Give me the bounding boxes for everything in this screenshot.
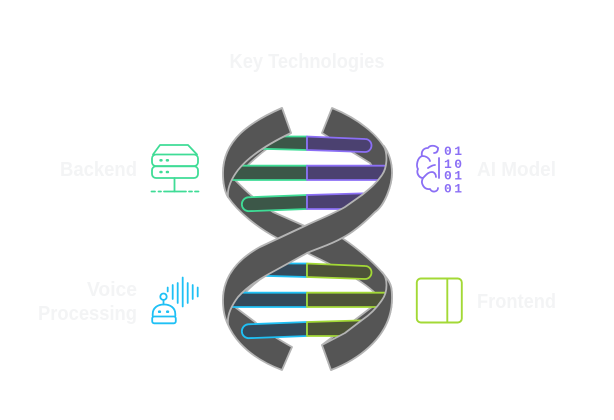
rung 4 blue — [252, 264, 307, 277]
front ribbon piece centre crossing — [223, 146, 392, 324]
back ribbon B — [223, 108, 392, 370]
label: AI Model: AI Model — [477, 159, 556, 181]
icon: server — [152, 145, 198, 192]
rung 2 purple — [307, 166, 388, 180]
rung 1 purple — [307, 136, 372, 152]
DNA helix diagram — [223, 108, 392, 370]
rung 3 purple — [307, 193, 375, 209]
rung 5 lime — [307, 293, 388, 307]
binary digits: 10 — [444, 157, 465, 172]
rung 6 blue — [242, 322, 307, 338]
label: Backend: Backend — [60, 159, 137, 181]
icon: brain with binary digits — [417, 144, 465, 196]
front ribbon piece lower right — [322, 272, 392, 370]
rung 4 lime — [307, 264, 372, 279]
binary digits — [444, 144, 465, 196]
binary digits: 01 — [444, 168, 465, 184]
back ribbon A — [223, 108, 392, 370]
label: Voice Processing — [38, 279, 137, 325]
rungs: backend (green left) and AI model (purple right) — [226, 136, 388, 211]
rung 6 lime — [307, 320, 375, 336]
title: Key Technologies — [230, 51, 384, 73]
front ribbon piece upper left — [223, 108, 291, 197]
rungs: voice processing (blue left) and frontend (lime right) — [226, 264, 388, 338]
rung 2 green — [226, 166, 307, 180]
binary digits: 01 — [444, 144, 465, 159]
rung 5 blue — [226, 293, 307, 307]
icon: layout panel — [417, 278, 462, 322]
rung 3 green — [242, 195, 307, 211]
icon: robot with sound wave — [152, 278, 198, 323]
rung 1 green — [252, 136, 307, 150]
binary digits: 01 — [444, 182, 465, 196]
label: Voice Processing: Voice — [87, 279, 137, 301]
label: Voice Processing: Processing — [38, 303, 137, 325]
label: Frontend: Frontend — [477, 291, 556, 313]
